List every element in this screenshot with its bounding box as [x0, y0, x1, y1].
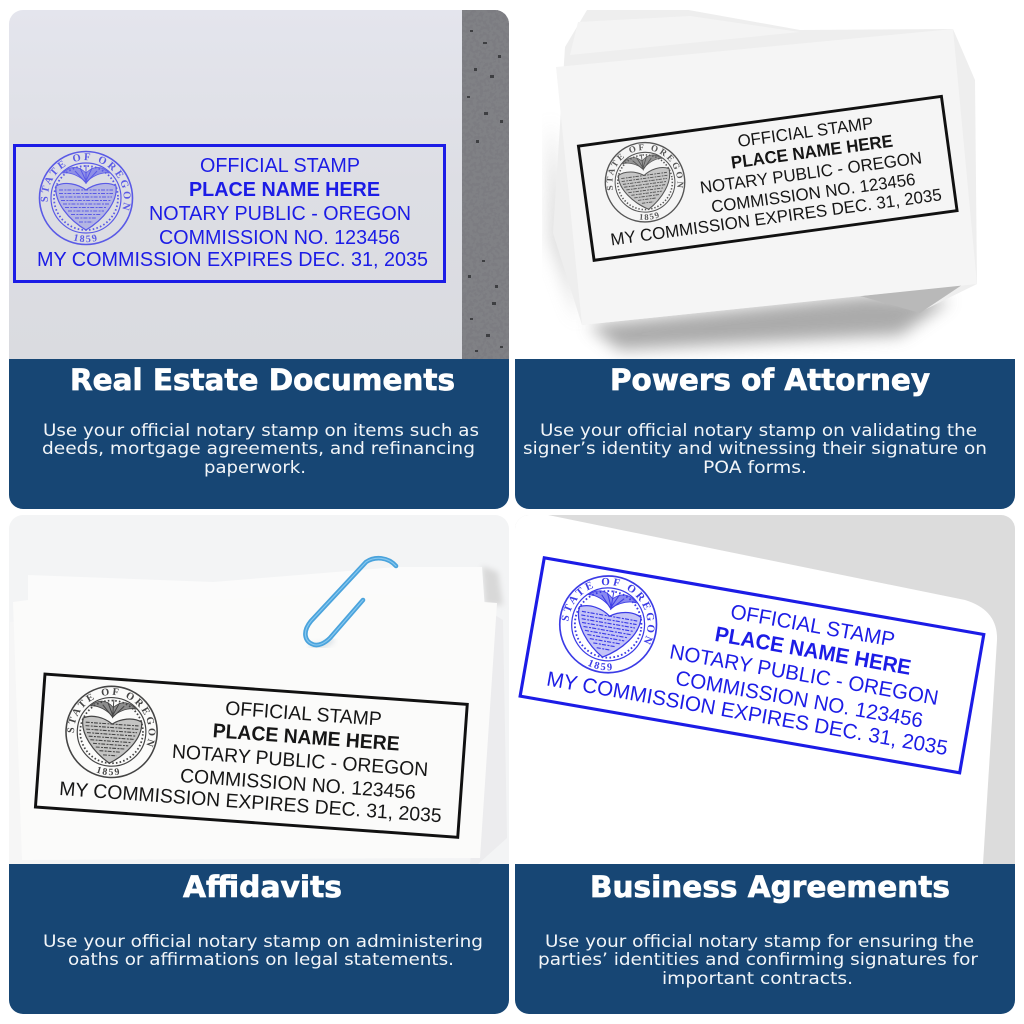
stamp text: COMMISSION NO. 123456 [179, 765, 417, 804]
photo: white card on gray [515, 515, 1015, 864]
description: parties’ identities and confirming signatures for [538, 950, 978, 970]
description: Use your official notary stamp on administering [43, 932, 483, 952]
stamp text [547, 605, 948, 754]
description [43, 932, 483, 970]
description: paperwork. [204, 458, 306, 478]
panel: business agreements [515, 515, 1015, 1014]
oregon seal [38, 150, 134, 246]
icon: paperclip [305, 558, 396, 647]
oregon seal: 1859 [588, 660, 612, 670]
stamp text: PLACE NAME HERE [730, 131, 894, 173]
description: POA forms. [703, 458, 807, 478]
stamp text: PLACE NAME HERE [212, 720, 400, 756]
oregon seal: STATE OF OREGON [606, 144, 684, 190]
top card [556, 66, 962, 323]
blue stamp impression [518, 556, 986, 775]
stamp text: COMMISSION NO. 123456 [674, 667, 925, 733]
stamp text: COMMISSION NO. 123456 [159, 227, 400, 249]
blue stamp impression [13, 144, 446, 283]
description: Use your official notary stamp for ensuring the [545, 932, 974, 952]
right under-sheet [470, 612, 507, 864]
stamp text: NOTARY PUBLIC - OREGON [699, 148, 923, 198]
stamp text: MY COMMISSION EXPIRES DEC. 31, 2035 [545, 668, 949, 760]
description: oaths or affirmations on legal statements. [68, 950, 454, 970]
black stamp impression [34, 672, 469, 839]
oregon seal: 1859 [74, 234, 97, 242]
description [538, 932, 978, 989]
heading: Powers of Attorney [610, 363, 930, 397]
oregon seal: STATE OF OREGON [562, 578, 654, 645]
panel: powers of attorney [515, 10, 1015, 509]
stamp text: OFFICIAL STAMP [200, 155, 360, 177]
panel: real estate documents [9, 10, 509, 509]
card stack [553, 9, 977, 325]
description [523, 421, 987, 478]
description: signer’s identity and witnessing their signature on [523, 439, 987, 459]
caption banner [9, 864, 509, 1014]
stamp text [37, 155, 428, 271]
oregon seal: 1859 [640, 212, 659, 220]
stamp text: PLACE NAME HERE [189, 178, 380, 201]
description: Use your official notary stamp on validating the [540, 421, 977, 441]
oregon seal: STATE OF OREGON [67, 688, 156, 748]
white card [515, 515, 997, 864]
stamp text: OFFICIAL STAMP [729, 600, 897, 652]
caption banner [515, 864, 1015, 1014]
photo: clipped papers [9, 515, 509, 864]
concrete strip [462, 10, 509, 359]
black stamp impression [576, 94, 959, 262]
stamp text: MY COMMISSION EXPIRES DEC. 31, 2035 [37, 249, 428, 271]
stamp text: NOTARY PUBLIC - OREGON [171, 741, 429, 781]
stamp text [60, 701, 441, 822]
oregon seal [604, 142, 686, 223]
far-left under-sheet [9, 620, 40, 864]
back sheet [476, 567, 484, 602]
stamp text: MY COMMISSION EXPIRES DEC. 31, 2035 [59, 778, 442, 827]
oregon seal [65, 686, 158, 778]
heading: Business Agreements [590, 870, 950, 904]
stamp text: MY COMMISSION EXPIRES DEC. 31, 2035 [609, 185, 943, 249]
oregon seal: 1859 [96, 766, 120, 776]
stamp text: OFFICIAL STAMP [224, 698, 382, 731]
caption banner [9, 359, 509, 509]
description: Use your official notary stamp on items such as [43, 421, 479, 441]
stamp text: OFFICIAL STAMP [736, 114, 874, 151]
oregon seal: STATE OF OREGON [40, 153, 131, 211]
description [42, 421, 479, 478]
caption banner [515, 359, 1015, 509]
front sheet [470, 602, 497, 858]
stamp text: NOTARY PUBLIC - OREGON [668, 640, 940, 710]
stamp text [611, 118, 942, 246]
stamp text: NOTARY PUBLIC - OREGON [149, 203, 411, 225]
photo: stamped paper on concrete [9, 10, 509, 359]
stamp text: PLACE NAME HERE [713, 622, 913, 680]
heading: Affidavits [183, 870, 342, 904]
heading: Real Estate Documents [70, 363, 455, 397]
description: important contracts. [662, 969, 853, 989]
photo: stack of cards [543, 10, 977, 359]
description: deeds, mortgage agreements, and refinancing [42, 439, 475, 459]
stamp text: COMMISSION NO. 123456 [710, 170, 917, 217]
panel: affidavits [9, 515, 509, 1014]
